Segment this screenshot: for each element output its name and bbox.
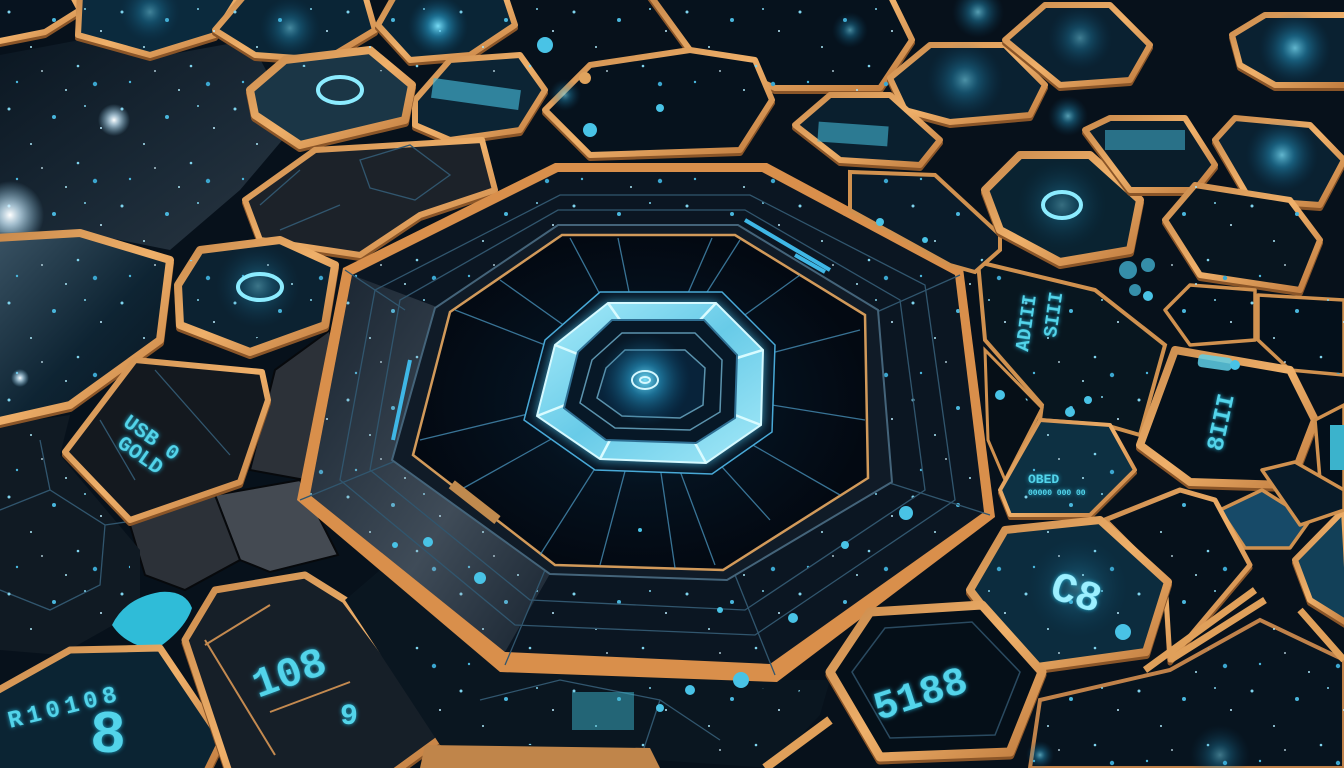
central cyan ring glow (537, 303, 763, 463)
panel: right lower dark cell (1105, 490, 1250, 660)
panel: ring cell left (178, 240, 335, 352)
panel: bottom right cells (1026, 590, 1344, 768)
panel: USB label cell (65, 360, 268, 520)
right side dark cells (850, 172, 1165, 480)
panel: right cells upper (1085, 118, 1344, 375)
label: barcode cell near centre (817, 122, 889, 146)
panel: grey cells lower left (0, 330, 340, 655)
central inner panel (564, 320, 737, 443)
text: cell label: USB 0 (118, 412, 183, 467)
panel: cracked dark cell (245, 140, 495, 255)
central cyan ring (537, 303, 763, 463)
panel: C8 cell (970, 520, 1168, 668)
radial lines (420, 238, 865, 568)
panel: lower centre board (345, 570, 830, 768)
text: right cell label: ADIII (1012, 293, 1042, 353)
text: small 9: 9 (340, 700, 358, 734)
main octagon glass sides (310, 275, 555, 652)
central core (599, 334, 691, 426)
gold bottom connector (765, 720, 830, 768)
panel: far right cells (1220, 405, 1344, 625)
text: right cell label: SIII (1040, 291, 1068, 339)
label: bottom left code: R10108 (5, 681, 125, 736)
main octagon gold frame (297, 163, 995, 682)
panel: ring cell right (985, 155, 1140, 262)
text: cell value: 5188 (869, 660, 974, 733)
icon: teal chip (112, 592, 192, 650)
main octagon inner dark panel (413, 235, 868, 570)
text: cell value: C8 (1044, 564, 1107, 625)
label: upper cell barcode (431, 78, 521, 110)
text: cell label: OBED (1028, 472, 1059, 487)
panel: upper-left starfield (0, 40, 295, 250)
icons: top row glows (120, 0, 1331, 136)
panel: right label cell (1140, 350, 1315, 485)
text: cell label (1028, 472, 1086, 498)
main octagon (297, 163, 995, 682)
gold strip bottom (420, 745, 660, 768)
scattered cyan particles (392, 37, 1240, 712)
icon: ring in upper cell (318, 77, 362, 103)
panel: OBED label cell (1000, 420, 1135, 515)
text: cell value: 108 (246, 639, 334, 710)
board labels (449, 480, 501, 524)
main octagon inner frame (392, 225, 892, 580)
ring segment lines (537, 303, 763, 463)
panel: 108 cell (185, 575, 445, 768)
main octagon concentric rings (300, 195, 990, 675)
text: cell label: GOLD (112, 433, 166, 481)
text: cell label: 8III (1203, 392, 1242, 454)
top row of hexagonal cells (0, 0, 1344, 165)
panel: bottom left cell with 8 (0, 648, 222, 768)
outer ring band (524, 292, 775, 474)
text: cell label: 00000 000 00 (1028, 489, 1086, 498)
main octagon board (310, 172, 984, 664)
text: right cell label (1012, 291, 1068, 353)
panel: large left cell (0, 233, 170, 422)
panel: 5188 cell (830, 605, 1042, 757)
board blue highlights (393, 220, 830, 440)
